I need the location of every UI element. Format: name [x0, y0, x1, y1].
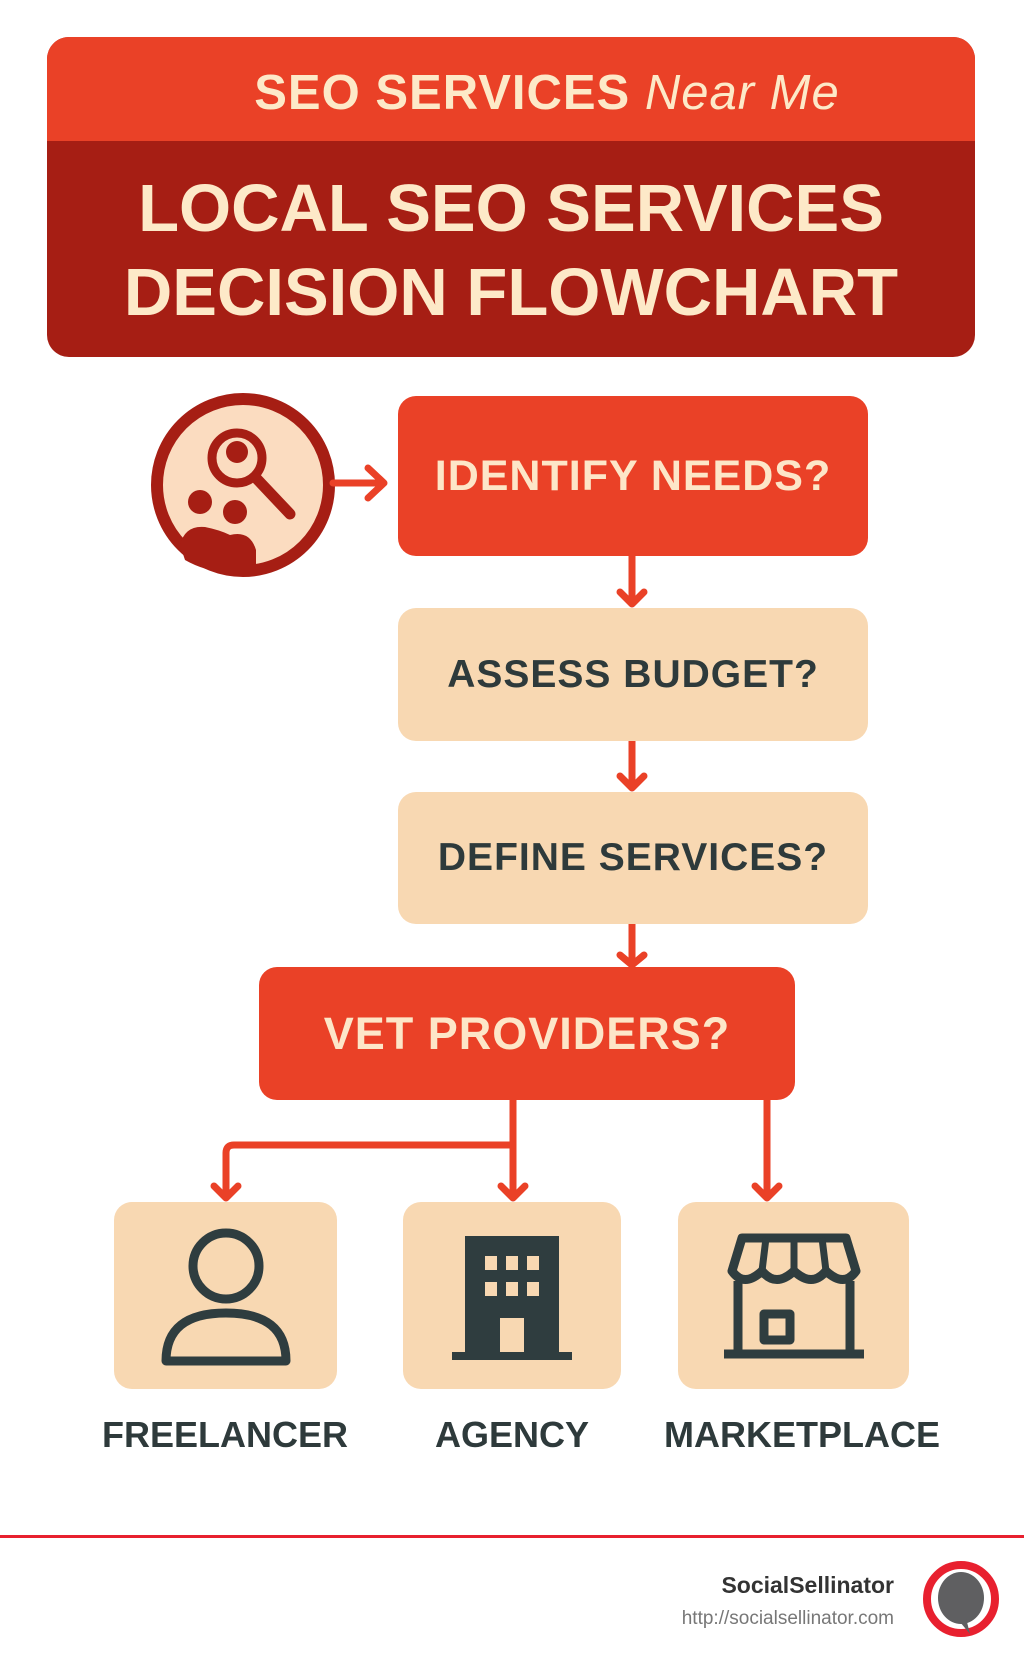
subtitle — [254, 66, 840, 120]
title: LOCAL SEO SERVICES — [138, 171, 884, 246]
title: DECISION FLOWCHART — [124, 255, 898, 330]
subtitle: Near Me — [645, 66, 840, 120]
icon: search people circle — [151, 393, 388, 577]
option: freelancer icon — [114, 1202, 337, 1389]
box: vet providers — [259, 967, 795, 1100]
box: identify needs — [398, 396, 868, 556]
label: agency: AGENCY — [435, 1414, 589, 1455]
box: assess budget — [398, 608, 868, 741]
box: define services: DEFINE SERVICES? — [438, 836, 828, 879]
footer brand text: SocialSellinator — [721, 1572, 894, 1598]
footer brand text — [682, 1572, 894, 1629]
box: assess budget: ASSESS BUDGET? — [447, 652, 819, 696]
subtitle: SEO SERVICES — [254, 66, 630, 120]
header panel — [47, 37, 975, 357]
icon: logo — [923, 1561, 999, 1637]
title — [124, 171, 898, 330]
box: vet providers: VET PROVIDERS? — [324, 1008, 730, 1058]
box: identify needs: IDENTIFY NEEDS? — [435, 452, 831, 500]
footer brand text: http://socialsellinator.com — [682, 1608, 894, 1629]
box: define services — [398, 792, 868, 924]
option: agency icon — [403, 1202, 621, 1389]
label: freelancer: FREELANCER — [102, 1414, 348, 1455]
label: marketplace: MARKETPLACE — [664, 1414, 940, 1455]
option: marketplace icon — [678, 1202, 909, 1389]
